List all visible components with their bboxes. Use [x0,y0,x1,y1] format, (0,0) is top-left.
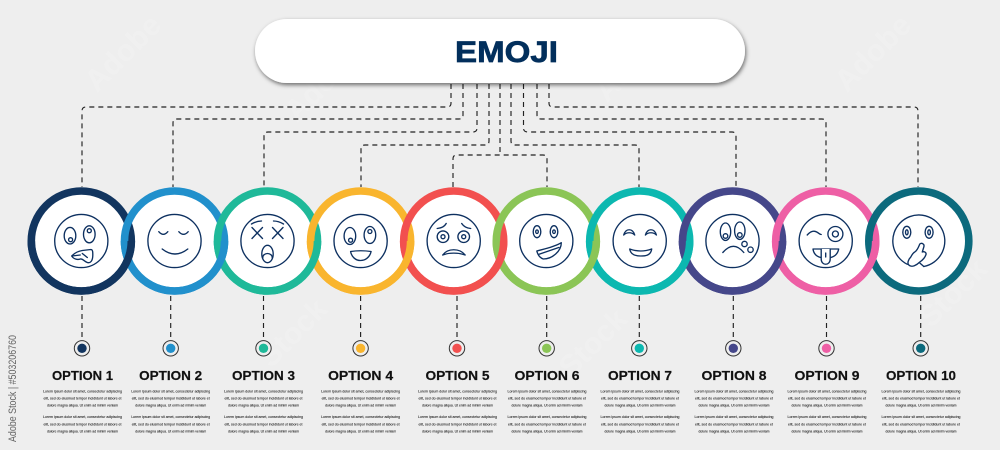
option 7: elit, sed do eiusmod tempor incididunt ut labore et [601,422,680,426]
text: Adobe [589,19,678,108]
option 4: dolore magna aliqua. Ut enim ad minim veniam [325,428,397,434]
connector: title to option 2 [173,84,463,187]
option 5: elit, sed do eiusmod tempor incididunt ut labore et [418,422,497,426]
option 10: dolore magna aliqua. Ut enim ad minim veniam [886,428,957,434]
option 7 [600,296,680,434]
option 8: elit, sed do eiusmod tempor incididunt ut labore et [695,422,774,426]
vertical stock credit: Adobe Stock | #503206760 [7,335,19,442]
option 10 [882,296,961,434]
text: Adobe [79,9,168,98]
icon: smiling closed eyes emoji [613,214,666,268]
option 10: elit, sed do eiusmod tempor incididunt ut labore et [882,422,961,426]
option 8: dolore magna aliqua. Ut enim ad minim veniam [698,402,770,408]
option 6: dolore magna aliqua. Ut enim ad minim veniam [512,428,583,434]
option 4: OPTION 4 [328,368,394,383]
option 2: dolore magna aliqua. Ut enim ad minim veniam [135,402,207,408]
option 6 [508,296,587,434]
connector: title to option 4 [361,84,489,187]
option 1: dolore magna aliqua. Ut enim ad minim veniam [47,402,119,408]
option 6: elit, sed do eiusmod tempor incididunt ut labore et [508,396,587,400]
option 5: elit, sed do eiusmod tempor incididunt ut labore et [418,396,497,400]
text: Adobe [829,9,918,98]
option 1: Lorem ipsum dolor sit amet, consectetur adipiscing [43,388,122,394]
option 9: elit, sed do eiusmod tempor incididunt ut labore et [788,396,867,400]
option 2: Lorem ipsum dolor sit amet, consectetur adipiscing [131,414,210,419]
option 3: Lorem ipsum dolor sit amet, consectetur adipiscing [224,414,303,419]
option 3: Lorem ipsum dolor sit amet, consectetur adipiscing [224,388,303,394]
title banner [255,19,745,83]
option 2: Lorem ipsum dolor sit amet, consectetur adipiscing [131,388,210,394]
option 5: Lorem ipsum dolor sit amet, consectetur adipiscing [418,414,497,419]
text: Adobe [279,39,368,128]
option 1: OPTION 1 [52,368,113,383]
option 1: elit, sed do eiusmod tempor incididunt ut labore et [44,422,122,426]
option 6: dolore magna aliqua. Ut enim ad minim veniam [512,402,583,408]
option 7: dolore magna aliqua. Ut enim ad minim veniam [604,428,676,434]
option 1 [43,296,122,434]
option 3: elit, sed do eiusmod tempor incididunt ut labore et [224,422,303,426]
icon: winking tongue emoji [799,214,852,268]
option 10: elit, sed do eiusmod tempor incididunt ut labore et [882,396,961,400]
icon: crying emoji [706,214,759,268]
option 10: Lorem ipsum dolor sit amet, consectetur adipiscing [882,414,960,419]
option 4: Lorem ipsum dolor sit amet, consectetur adipiscing [321,388,400,394]
option 3: OPTION 3 [232,368,295,383]
option 8: Lorem ipsum dolor sit amet, consectetur adipiscing [694,388,774,394]
option 7: Lorem ipsum dolor sit amet, consectetur adipiscing [600,414,680,419]
option 6: elit, sed do eiusmod tempor incididunt ut labore et [508,422,587,426]
text: Stock [253,293,334,374]
title: EMOJI [455,36,558,69]
icon: anxious emoji [427,214,480,268]
option 9: dolore magna aliqua. Ut enim ad minim veniam [792,428,863,434]
icon: laughing smile emoji [520,214,573,268]
option 1: Lorem ipsum dolor sit amet, consectetur adipiscing [43,414,122,419]
icon: relieved emoji [148,214,201,268]
option 3: dolore magna aliqua. Ut enim ad minim veniam [228,428,300,434]
option 5 [418,296,497,434]
option 9: OPTION 9 [794,368,860,383]
option 3 [224,296,303,434]
option 1: elit, sed do eiusmod tempor incididunt ut labore et [44,396,122,400]
option 4: elit, sed do eiusmod tempor incididunt ut labore et [322,422,400,426]
option 2 [131,296,210,434]
icon: tongue out emoji [55,214,108,268]
option 5: Lorem ipsum dolor sit amet, consectetur adipiscing [418,388,497,394]
option 5: OPTION 5 [426,368,490,383]
option 2: dolore magna aliqua. Ut enim ad minim veniam [135,428,207,434]
text: Stock [553,303,634,384]
connector: title to option 10 [549,84,918,187]
connector: title to option 8 [524,84,736,187]
connector: title to option 1 [82,84,451,187]
option 8: OPTION 8 [702,368,766,383]
option 10: dolore magna aliqua. Ut enim ad minim veniam [886,402,957,408]
option 1: dolore magna aliqua. Ut enim ad minim veniam [47,428,119,434]
option 10: Lorem ipsum dolor sit amet, consectetur adipiscing [882,388,960,394]
option 2: OPTION 2 [139,368,202,383]
icon: happy rolling eyes emoji [334,214,387,268]
icon: thinking hand emoji [893,215,945,266]
option 6: Lorem ipsum dolor sit amet, consectetur adipiscing [508,414,586,419]
connector: title to option 9 [537,84,826,187]
connector: title to option 7 [511,84,639,187]
option 7: elit, sed do eiusmod tempor incididunt ut labore et [601,396,680,400]
interlocked rings [31,191,969,291]
option 9: Lorem ipsum dolor sit amet, consectetur adipiscing [788,388,866,394]
option 4 [321,296,400,434]
option 4: elit, sed do eiusmod tempor incididunt ut labore et [322,396,400,400]
option 10: OPTION 10 [886,368,956,383]
option 3: dolore magna aliqua. Ut enim ad minim veniam [228,402,300,408]
connector: title to option 3 [264,84,477,187]
connector: title to options 5 and 6 [453,84,547,187]
option 4: dolore magna aliqua. Ut enim ad minim veniam [325,402,397,408]
option 9: Lorem ipsum dolor sit amet, consectetur adipiscing [788,414,866,419]
option 2: elit, sed do eiusmod tempor incididunt ut labore et [132,422,210,426]
option 7: OPTION 7 [608,368,672,383]
option 9 [788,296,867,434]
text: Stock [913,253,994,334]
option 2: elit, sed do eiusmod tempor incididunt ut labore et [132,396,210,400]
option 6: Lorem ipsum dolor sit amet, consectetur adipiscing [508,388,586,394]
option 8 [694,296,774,434]
option 8: dolore magna aliqua. Ut enim ad minim veniam [698,428,770,434]
option 3: elit, sed do eiusmod tempor incididunt ut labore et [224,396,303,400]
option 7: dolore magna aliqua. Ut enim ad minim veniam [604,402,676,408]
option 6: OPTION 6 [514,368,580,383]
option 5: dolore magna aliqua. Ut enim ad minim veniam [422,428,494,434]
option 8: elit, sed do eiusmod tempor incididunt ut labore et [695,396,774,400]
option 5: dolore magna aliqua. Ut enim ad minim veniam [422,402,494,408]
option 7: Lorem ipsum dolor sit amet, consectetur adipiscing [600,388,680,394]
option 9: elit, sed do eiusmod tempor incididunt ut labore et [788,422,867,426]
option 8: Lorem ipsum dolor sit amet, consectetur adipiscing [694,414,774,419]
option 9: dolore magna aliqua. Ut enim ad minim veniam [792,402,863,408]
icon: dizzy emoji [241,214,294,268]
option 4: Lorem ipsum dolor sit amet, consectetur adipiscing [321,414,400,419]
